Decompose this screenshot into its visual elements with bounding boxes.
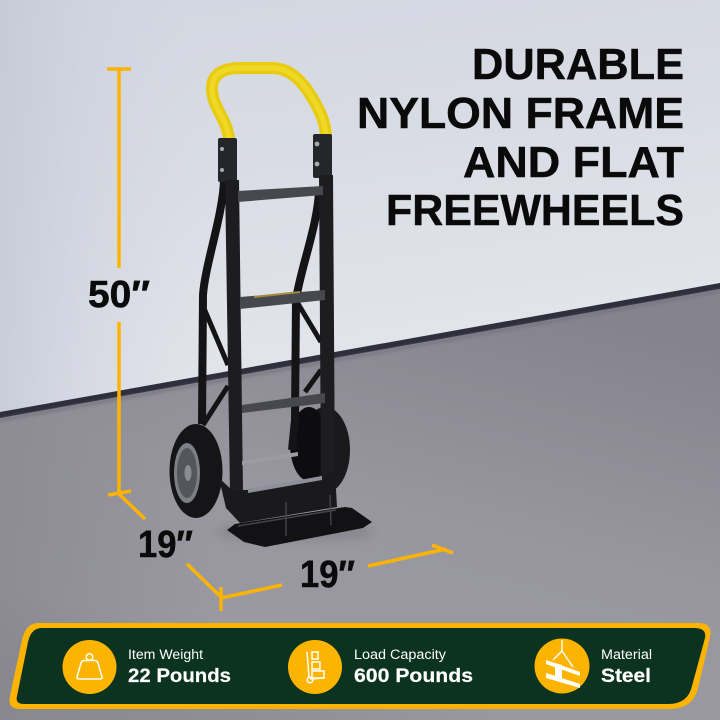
icon: hand truck: [288, 640, 342, 694]
spec: material: [534, 638, 652, 694]
front wheel: [170, 424, 222, 518]
bracket highlight: [248, 476, 322, 493]
background: wall: [0, 0, 720, 420]
yellow handle: [212, 68, 326, 139]
cross bars: [238, 186, 325, 413]
dimension height: 50 inches: [88, 69, 150, 495]
title: DURABLE: [472, 40, 684, 89]
title: [357, 40, 684, 235]
dimension depth: 19 inches: 19″: [138, 524, 193, 566]
spec: load capacity: [288, 640, 473, 694]
floor left shading: [0, 289, 720, 720]
spec: item weight: [62, 640, 231, 694]
rear support struts: [202, 180, 321, 450]
icon: steel beam: [534, 638, 590, 694]
hand truck: [170, 68, 375, 547]
icon: weight: [62, 640, 116, 694]
spec: material: Steel: [601, 665, 651, 687]
wall left shading: [0, 0, 720, 420]
background: floor: [0, 289, 720, 720]
title: FREEWHEELS: [386, 186, 684, 235]
toe plate ribs: [238, 495, 336, 536]
spec: load capacity: 600 Pounds: [354, 665, 473, 687]
rear wheel: [290, 407, 350, 493]
floor shadow: [215, 524, 375, 540]
spec panel: [9, 623, 710, 709]
dimension width: 19 inches: 19″: [300, 554, 355, 596]
title: NYLON FRAME: [357, 89, 684, 138]
dimension width: 19 inches: [221, 545, 453, 598]
main frame rails: [225, 175, 335, 492]
spec: item weight: Item Weight: [128, 647, 203, 662]
toe plate bracket: [219, 472, 337, 523]
axle: [242, 452, 298, 465]
dimension depth: 19 inches: [119, 494, 221, 611]
handle sockets: [218, 134, 332, 182]
spec: load capacity: Load Capacity: [354, 647, 446, 662]
toe plate: [227, 507, 372, 547]
spec: item weight: 22 Pounds: [128, 665, 231, 687]
title: AND FLAT: [463, 138, 684, 187]
bar lettering strip: [254, 291, 300, 298]
dimension height: 50 inches: 50″: [88, 274, 150, 316]
background: baseboard line: [0, 283, 720, 422]
spec: material: Material: [601, 647, 652, 662]
